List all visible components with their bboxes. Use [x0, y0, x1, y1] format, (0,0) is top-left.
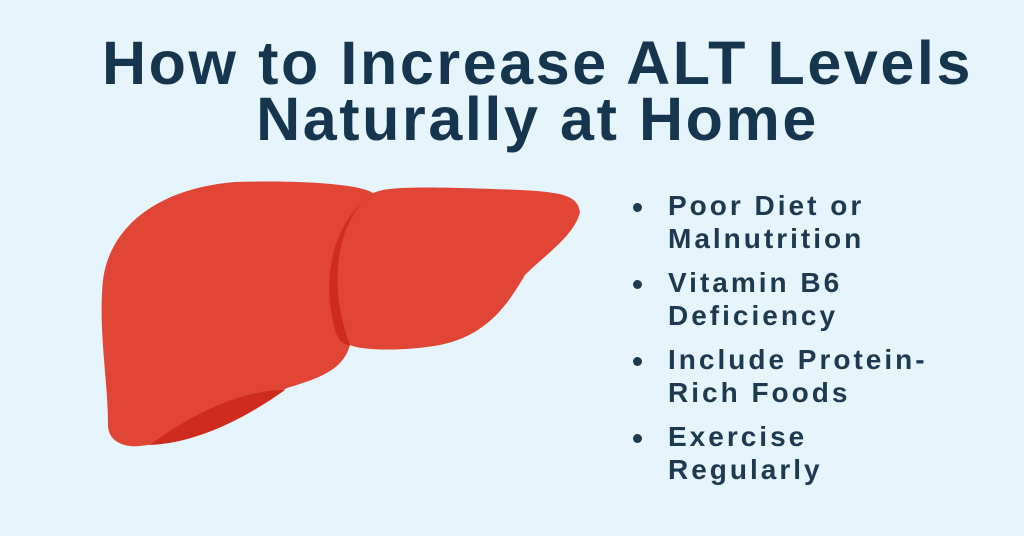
item 4: Exercise [668, 421, 807, 452]
item 1: Malnutrition [668, 223, 864, 254]
item 4 [633, 420, 928, 486]
item 4: Regularly [668, 454, 823, 485]
item 1: Poor Diet or [668, 190, 864, 221]
item 2 [633, 266, 928, 332]
title [102, 29, 973, 153]
item 2: Vitamin B6 [668, 267, 842, 298]
item 3: Rich Foods [668, 377, 850, 408]
item 2: Deficiency [668, 300, 838, 331]
item 1 [633, 189, 928, 255]
item 3 [633, 343, 928, 409]
title: How to Increase ALT Levels [102, 29, 973, 97]
bullet list [633, 190, 928, 485]
title: Naturally at Home [256, 85, 819, 153]
item 3: Include Protein- [668, 344, 928, 375]
